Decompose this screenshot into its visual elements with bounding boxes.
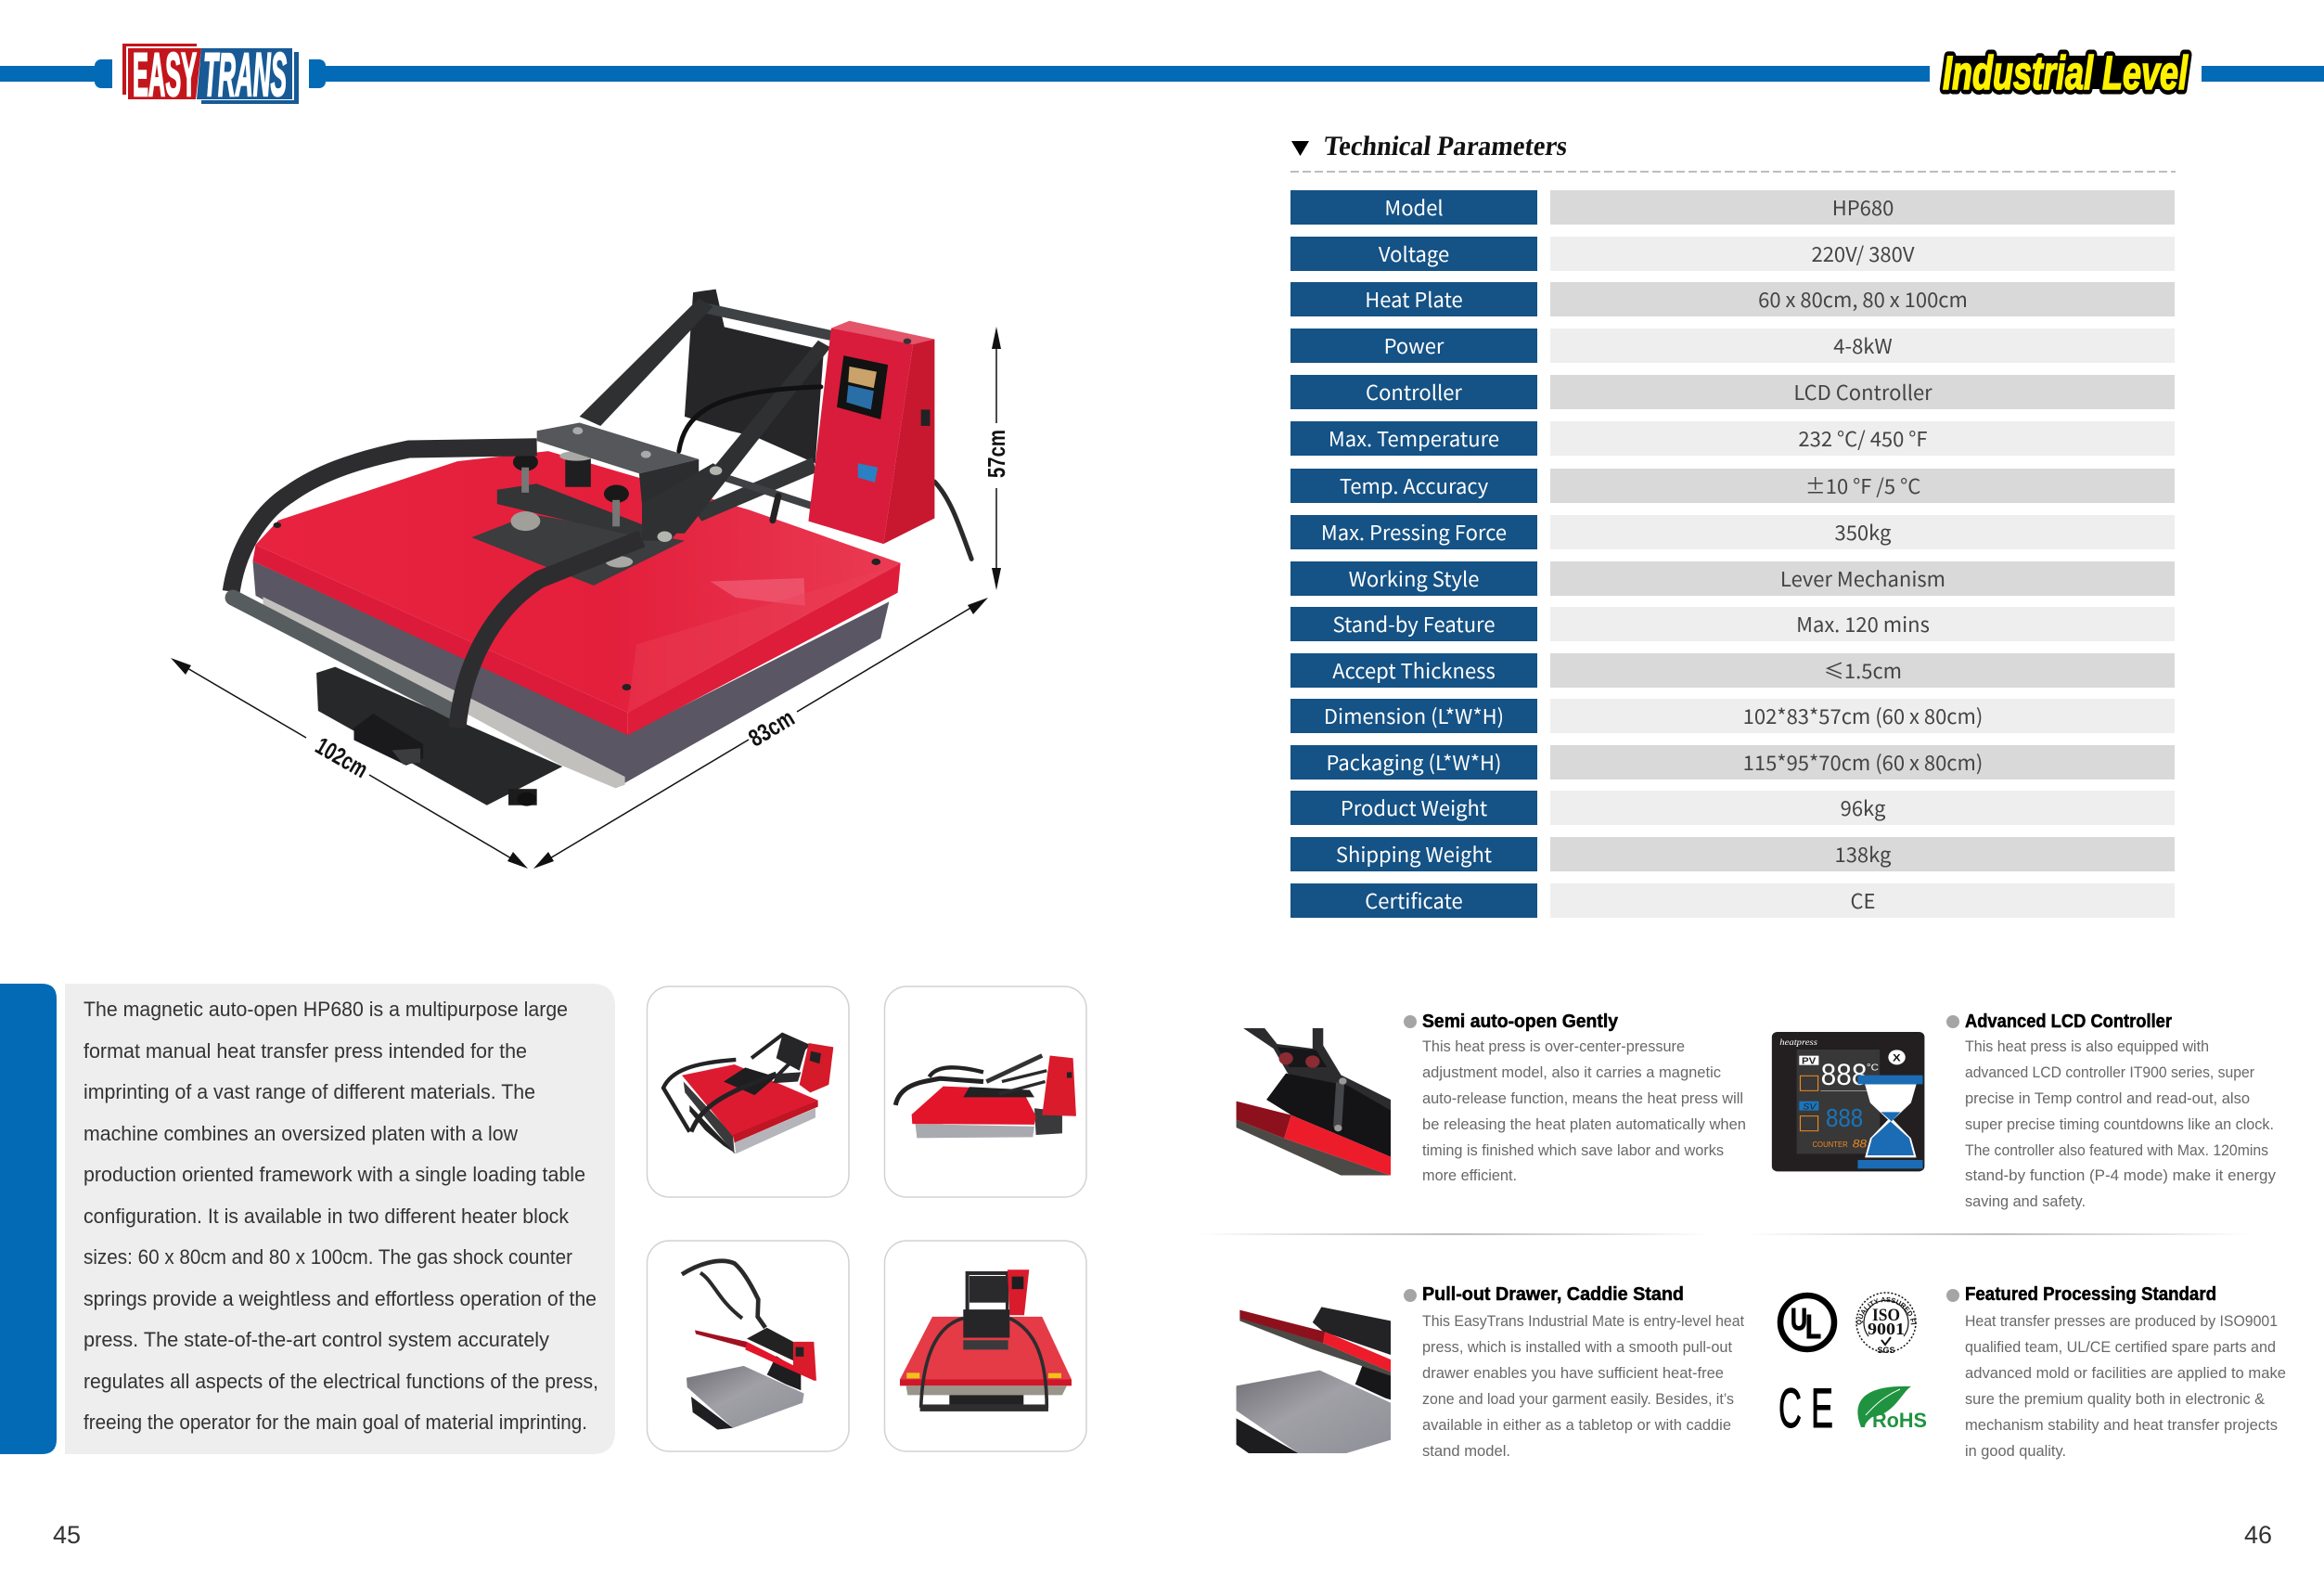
front bar: [233, 598, 455, 713]
row: Controller: LCD Controller: [1793, 377, 1932, 406]
photo: LCD controller with hourglass: 888: [1821, 1059, 1867, 1091]
logo: RoHS: [1857, 1386, 1927, 1432]
row: Product Weight: 96kg: [1841, 792, 1886, 822]
main product illustration: heat press: [231, 290, 971, 806]
feature: Advanced LCD Controller: precise in Temp control and read-out, also: [1965, 1090, 2250, 1107]
row: Max. Pressing Force: 350kg: [1835, 517, 1892, 547]
feature: Pull-out Drawer, Caddie Stand: press, which is installed with a smooth pull-out: [1422, 1339, 1732, 1356]
row: Power: Power: [1384, 330, 1444, 360]
row: Voltage: 220V/ 380V: [1812, 238, 1915, 268]
hose: [679, 387, 821, 451]
logo: ISO 9001: ISO: [1872, 1306, 1900, 1325]
row: Packaging: 115*95*70cm (60 x 80cm): [1743, 747, 1983, 777]
row: Model: Model: [1384, 192, 1444, 222]
row: Power: [1290, 329, 2175, 363]
divider left: [1199, 1233, 1707, 1235]
silver lower platen strip: [263, 597, 625, 788]
feature: Advanced LCD Controller: super precise timing countdowns like an clock.: [1965, 1116, 2274, 1133]
row: Temp. Accuracy: [1290, 469, 2175, 503]
photo: LCD controller with hourglass: 88: [1853, 1138, 1868, 1150]
row: Accept Thickness: Accept Thickness: [1332, 655, 1496, 685]
feature: Featured Processing Standard: sure the premium quality both in electronic &: [1965, 1391, 2265, 1408]
dimension arrow: width 102cm: 102cm: [311, 731, 373, 783]
row: Stand-by Feature: [1290, 607, 2175, 641]
feature: Advanced LCD Controller: Advanced LCD Controller: [1965, 1012, 2172, 1032]
dashed divider: [1290, 171, 2176, 173]
text: TRANS: [203, 40, 287, 109]
lower mounting beam: [497, 483, 642, 536]
row: Stand-by Feature: Max. 120 mins: [1796, 609, 1930, 638]
thumbnail: three-quarter view: [648, 986, 849, 1197]
logo: UL: U: [1791, 1302, 1807, 1336]
row: Shipping Weight: Shipping Weight: [1336, 839, 1492, 869]
upper mounting beam: [537, 422, 699, 504]
feature: Pull-out Drawer, Caddie Stand: available in either as a tabletop or with caddie: [1422, 1417, 1731, 1434]
photo: latch mechanism: [1237, 1028, 1391, 1176]
row: Model: [1290, 190, 2175, 225]
header band: centre segment: [309, 59, 1930, 88]
left handle band: [231, 447, 537, 591]
dimension arrow: width 102cm: [171, 658, 528, 869]
row: Stand-by Feature: Stand-by Feature: [1332, 609, 1496, 638]
panel: product description: regulates all aspects of the electrical functions of the press,: [83, 1370, 598, 1393]
row: Accept Thickness: [1290, 653, 2175, 688]
feature: Featured Processing Standard: advanced mold or facilities are applied to make: [1965, 1365, 2286, 1382]
dimension arrow: height 57cm: [982, 327, 1010, 590]
adjustment knobs: [513, 427, 651, 526]
logo: UL: L: [1805, 1308, 1821, 1346]
logo: ISO 9001: 9001: [1868, 1320, 1905, 1338]
row: Dimension: Dimension (L*W*H): [1324, 701, 1504, 730]
panel: product description: [65, 984, 615, 1454]
row: Controller: [1290, 375, 2175, 409]
row: Shipping Weight: 138kg: [1835, 839, 1892, 869]
panel: product description: configuration. It is available in two different heater block: [83, 1205, 570, 1228]
panel: product description: machine combines an oversized platen with a low: [83, 1122, 518, 1145]
divider right: [1749, 1233, 2250, 1235]
feature: Featured Processing Standard: Featured Processing Standard: [1965, 1284, 2216, 1305]
row: Product Weight: [1290, 791, 2175, 825]
feature: Advanced LCD Controller: This heat press is also equipped with: [1965, 1038, 2209, 1055]
row: Heat Plate: Heat Plate: [1365, 284, 1463, 314]
row: Model: HP680: [1832, 192, 1894, 222]
pivot bolts: [658, 466, 722, 542]
feature: Advanced LCD Controller: saving and safety.: [1965, 1193, 2086, 1210]
logo: UL: [1780, 1295, 1834, 1349]
feature: Featured Processing Standard: Heat transfer presses are produced by ISO9001: [1965, 1313, 2278, 1330]
mounting plate: [471, 514, 685, 586]
LCD window: [837, 355, 888, 419]
row: Heat Plate: 60 x 80cm, 80 x 100cm: [1758, 284, 1968, 314]
badge: Industrial Level: Industrial Level: [1943, 46, 2189, 99]
feature: Featured Processing Standard: mechanism stability and heat transfer projects: [1965, 1417, 2278, 1434]
dimension arrow: depth 83cm: [533, 598, 988, 869]
row: Max. Temperature: [1290, 421, 2175, 456]
feature: Pull-out Drawer, Caddie Stand: [1237, 1284, 1744, 1460]
row: Max. Temperature: 232 °C/ 450 °F: [1798, 423, 1928, 453]
thumbnail: side view: [885, 986, 1086, 1197]
row: Certificate: Certificate: [1365, 885, 1463, 915]
photo: pull-out drawer: [1237, 1307, 1391, 1453]
row: Working Style: Lever Mechanism: [1780, 563, 1945, 593]
page number 46: 46: [2244, 1521, 2272, 1549]
header band: left segment: [0, 59, 112, 88]
row: Certificate: CE: [1850, 885, 1876, 915]
logo: CE: E: [1811, 1377, 1833, 1439]
row: Max. Temperature: Max. Temperature: [1329, 423, 1499, 453]
feature: Featured Processing Standard: qualified team, UL/CE certified spare parts and: [1965, 1339, 2276, 1356]
row: Product Weight: Product Weight: [1341, 792, 1487, 822]
blue side tab: [0, 984, 57, 1454]
panel: product description: imprinting of a vast range of different materials. The: [83, 1080, 535, 1103]
logo: EasyTrans: EASY: [133, 40, 197, 109]
rear frame: [685, 290, 829, 463]
dimension arrow: height 57cm: 57cm: [982, 430, 1010, 478]
photo: LCD controller with hourglass: SV: [1803, 1102, 1817, 1112]
row: Max. Pressing Force: [1290, 515, 2175, 549]
photo: LCD controller with hourglass: heatpress: [1779, 1038, 1817, 1048]
base drawer and caster: [316, 667, 562, 806]
row: Power: 4-8kW: [1833, 330, 1893, 360]
panel: product description: press. The state-of-the-art control system accurately: [83, 1328, 549, 1351]
photo: LCD controller with hourglass: 888: [1826, 1104, 1863, 1132]
row: Accept Thickness: ≤1.5cm: [1824, 655, 1902, 685]
row: Shipping Weight: [1290, 837, 2175, 871]
right handle band: [457, 538, 642, 728]
thumbnail: front view: [885, 1241, 1086, 1451]
panel: product description: production oriented framework with a single loading table: [83, 1163, 585, 1186]
logo: RoHS: RoHS: [1872, 1409, 1927, 1432]
dimension arrow: depth 83cm: 83cm: [743, 703, 799, 753]
feature: Semi auto-open Gently: timing is finished which save labor and works: [1422, 1142, 1724, 1159]
feature: Semi auto-open Gently: [1237, 1012, 1746, 1184]
panel: product description: format manual heat transfer press intended for the: [83, 1039, 527, 1063]
feature: Pull-out Drawer, Caddie Stand: stand model.: [1422, 1443, 1510, 1460]
blue switch: [858, 463, 878, 483]
panel: product description: freeing the operator for the main goal of material imprinting.: [83, 1411, 587, 1434]
row: Working Style: Working Style: [1349, 563, 1479, 593]
logo: ISO 9001: SGS: [1877, 1346, 1895, 1355]
feature: Advanced LCD Controller: advanced LCD controller IT900 series, super: [1965, 1064, 2254, 1081]
logo: CE: C: [1778, 1377, 1802, 1439]
row: Temp. Accuracy: ±10 °F /5 °C: [1805, 470, 1920, 500]
thumbnail frames and product views: [648, 986, 1086, 1451]
pressure column: [511, 451, 633, 568]
control box: [808, 321, 934, 544]
feature: Pull-out Drawer, Caddie Stand: zone and load your garment easily. Besides, it’s: [1422, 1391, 1734, 1408]
photo: LCD controller with hourglass: X: [1893, 1051, 1902, 1063]
grey pad: [252, 561, 889, 788]
panel: product description: springs provide a weightless and effortless operation of the: [83, 1287, 597, 1310]
feature: Featured Processing Standard: in good quality.: [1965, 1443, 2066, 1460]
row: Heat Plate: [1290, 282, 2175, 316]
feature: Semi auto-open Gently: be releasing the heat platen automatically when: [1422, 1116, 1746, 1133]
logo: ISO 9001: [1855, 1292, 1917, 1355]
feature: Advanced LCD Controller: [1772, 1012, 2277, 1210]
photo: LCD controller with hourglass: PV: [1802, 1056, 1817, 1066]
row: Packaging: Packaging (L*W*H): [1327, 747, 1501, 777]
badge: Industrial Level: Industrial Level: [1943, 46, 2189, 99]
side arm and bars: [693, 457, 816, 522]
feature: Semi auto-open Gently: auto-release function, means the heat press will: [1422, 1090, 1743, 1107]
feature: Pull-out Drawer, Caddie Stand: This EasyTrans Industrial Mate is entry-level heat: [1422, 1313, 1744, 1330]
panel: product description: The magnetic auto-open HP680 is a multipurpose large: [83, 998, 568, 1021]
row: Max. Pressing Force: Max. Pressing Force: [1321, 517, 1507, 547]
rear arms: [580, 299, 830, 541]
thumbnail: opened view: [648, 1241, 849, 1451]
feature: Advanced LCD Controller: The controller also featured with Max. 120mins: [1965, 1142, 2268, 1159]
feature: Pull-out Drawer, Caddie Stand: drawer enables you have sufficient heat-free: [1422, 1365, 1724, 1382]
feature: Semi auto-open Gently: adjustment model, also it carries a magnetic: [1422, 1064, 1721, 1081]
row: Certificate: [1290, 883, 2175, 918]
page number 45: 45: [53, 1521, 81, 1549]
photo: LCD controller with hourglass: [1772, 1032, 1924, 1171]
rocker switch: [921, 409, 930, 426]
feature: Pull-out Drawer, Caddie Stand: Pull-out Drawer, Caddie Stand: [1422, 1284, 1684, 1305]
power cord: [934, 482, 971, 559]
row: Voltage: [1290, 237, 2175, 271]
panel: product description: sizes: 60 x 80cm and 80 x 100cm. The gas shock counter: [83, 1245, 572, 1269]
feature: Semi auto-open Gently: This heat press is over-center-pressure: [1422, 1038, 1685, 1055]
row: Dimension: [1290, 699, 2175, 733]
heading: Technical Parameters: Technical Parameters: [1322, 130, 1569, 161]
row: Temp. Accuracy: Temp. Accuracy: [1340, 470, 1489, 500]
photo: LCD controller with hourglass: °C: [1867, 1063, 1879, 1073]
red upper platen: [252, 451, 901, 735]
logo: ISO 9001: QUALITY ASSURED FIRM: [1856, 1297, 1916, 1325]
feature: Semi auto-open Gently: more efficient.: [1422, 1167, 1517, 1184]
row: Dimension: 102*83*57cm (60 x 80cm): [1743, 701, 1983, 730]
hourglass: [1857, 1076, 1922, 1168]
row: Packaging: [1290, 745, 2175, 780]
feature: Semi auto-open Gently: Semi auto-open Gently: [1422, 1012, 1619, 1032]
row: Controller: Controller: [1366, 377, 1462, 406]
parameters table: [1290, 190, 2175, 918]
header band: right segment: [2202, 66, 2324, 82]
feature: Advanced LCD Controller: stand-by function (P-4 mode) make it energy: [1965, 1167, 2277, 1184]
photo: LCD controller with hourglass: COUNTER: [1812, 1140, 1848, 1149]
row: Working Style: [1290, 561, 2175, 596]
row: Voltage: Voltage: [1379, 238, 1449, 268]
